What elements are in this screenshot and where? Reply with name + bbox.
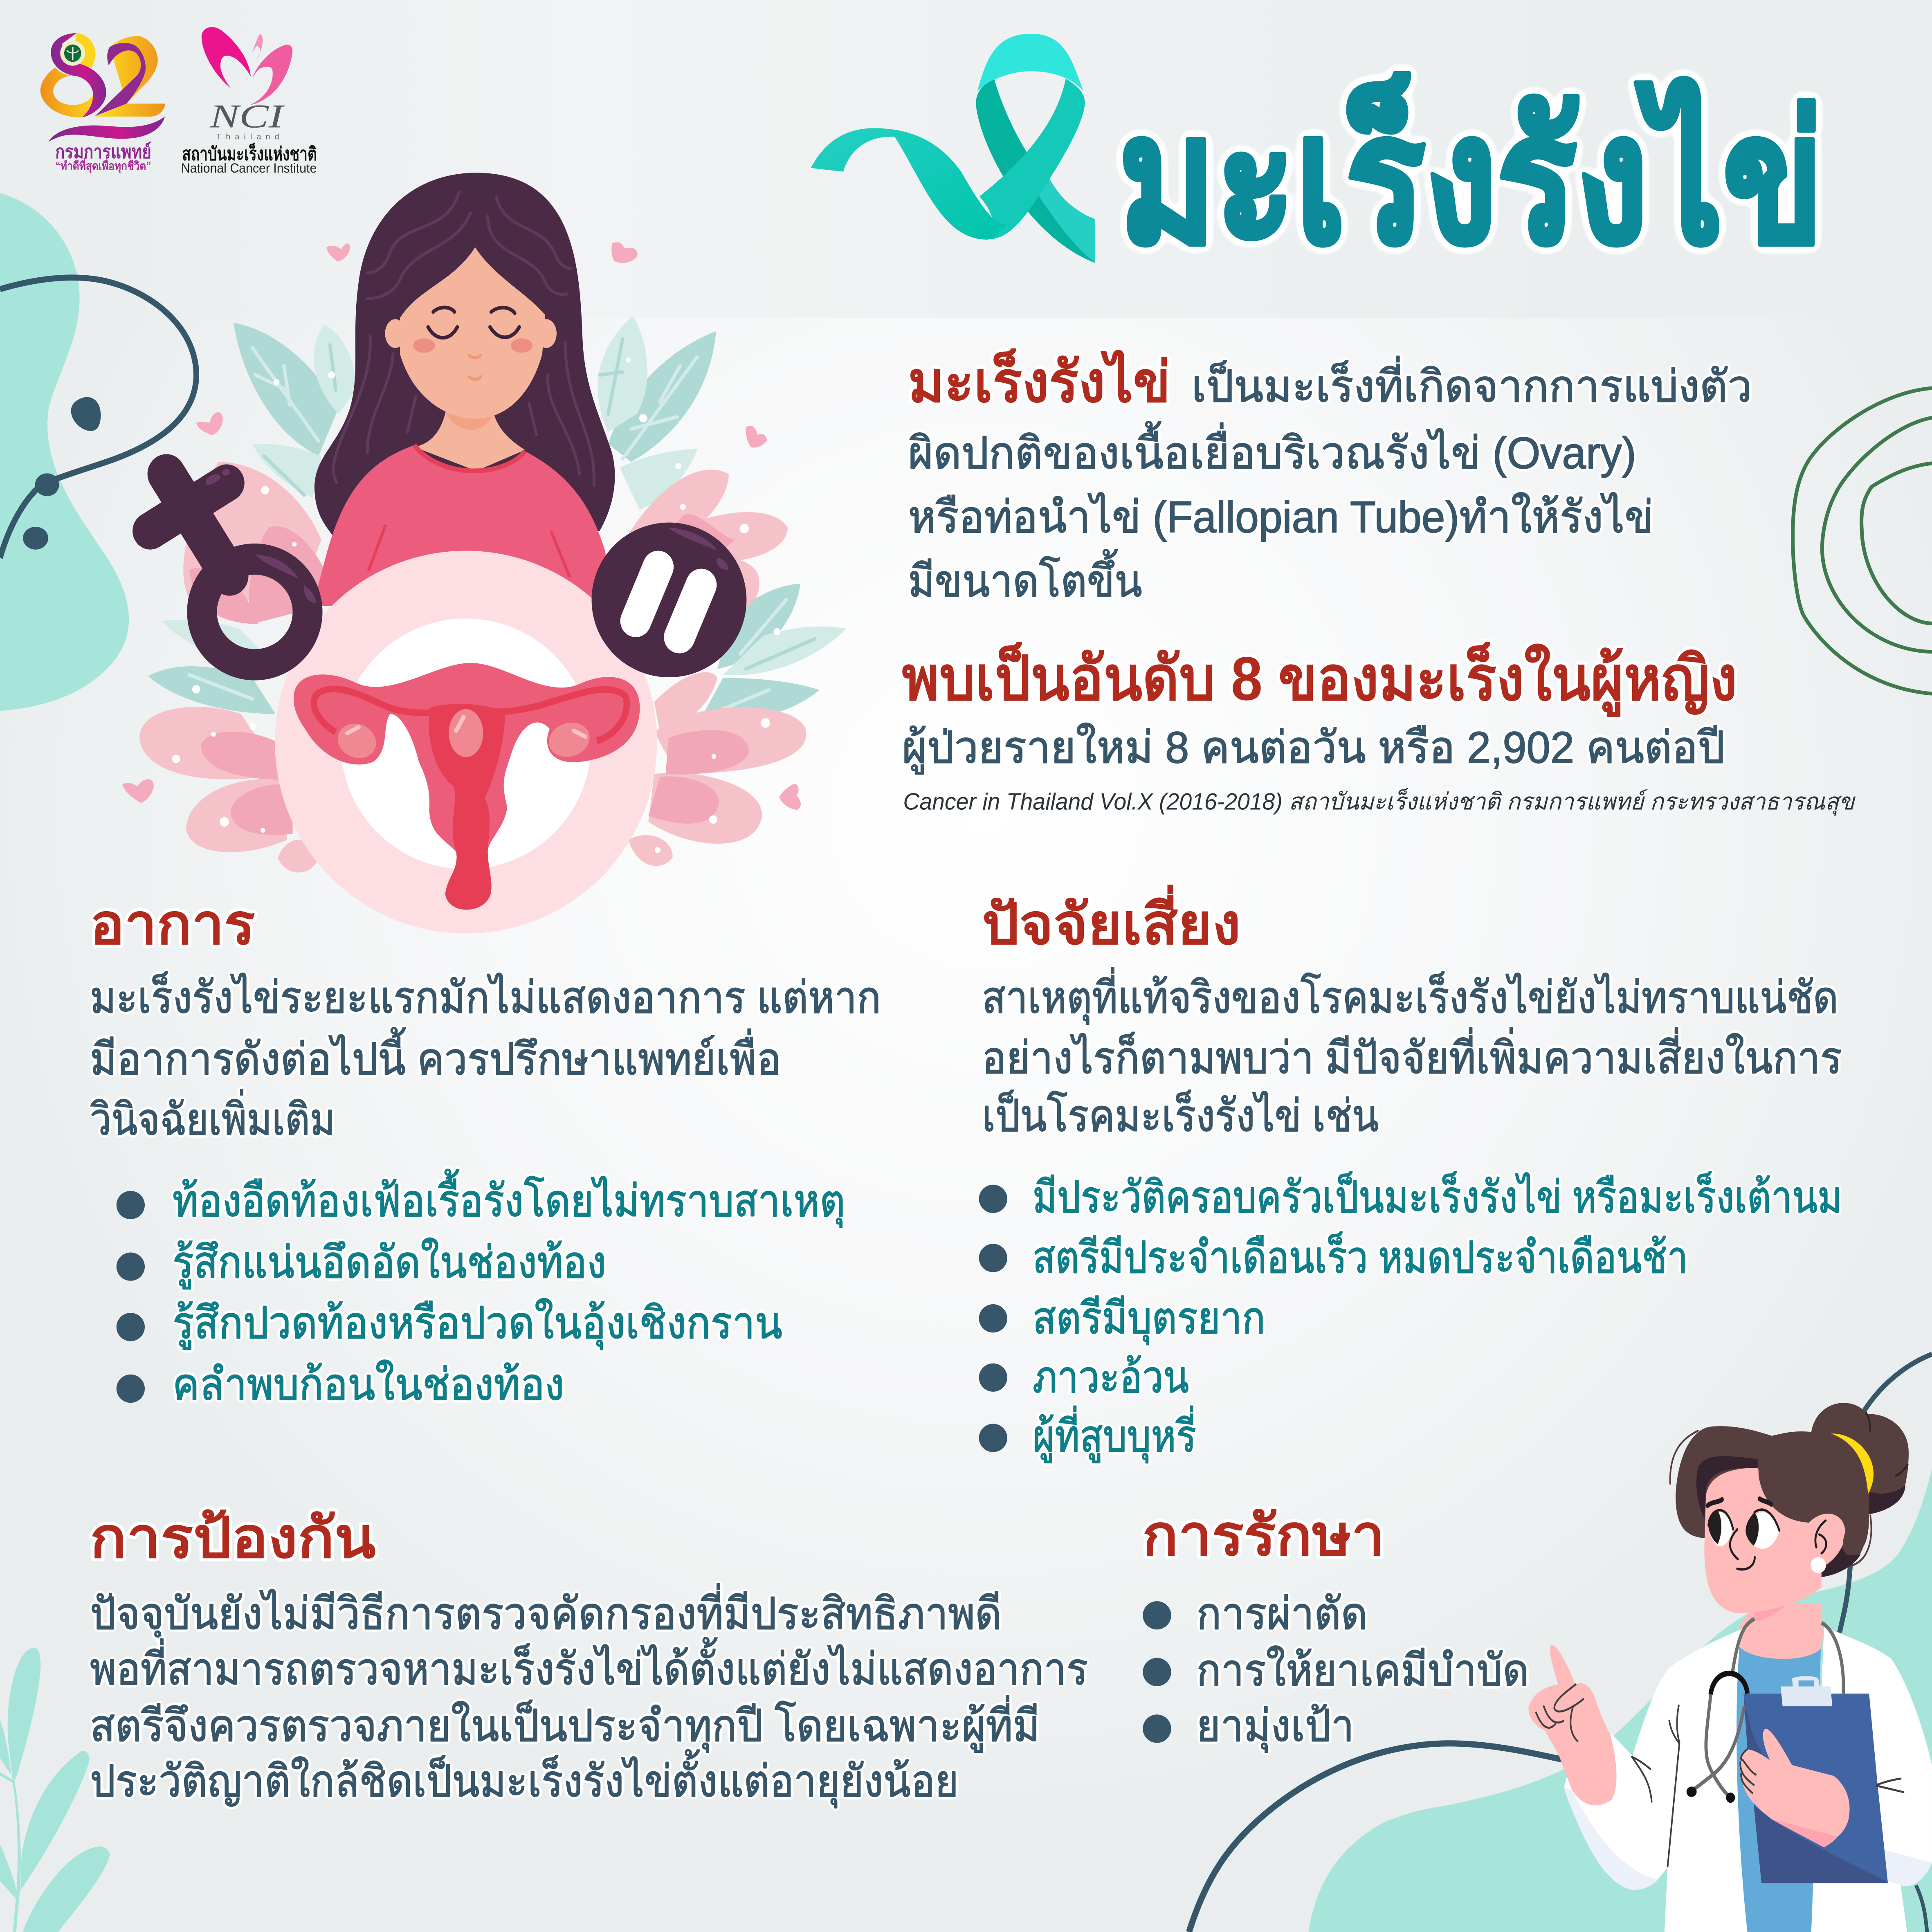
list: risk factors: สตรีมีประจำเดือนเร็ว หมดประจำเดือนช้า <box>1033 1231 1688 1282</box>
decorative rings: right <box>1793 388 1932 694</box>
logo: Department of Medical Services 82 <box>40 33 165 173</box>
left hand pointing <box>1528 1644 1617 1805</box>
statistic callout: Cancer in Thailand Vol.X (2016-2018) สถาบันมะเร็งแห่งชาติ กรมการแพทย์ กระทรวงสาธารณสุข <box>903 788 1856 815</box>
heading: symptoms: อาการ <box>90 893 255 956</box>
text: prevention: ปัจจุบันยังไม่มีวิธีการตรวจคัดกรองที่มีประสิทธิภาพดี <box>90 1583 1002 1641</box>
list: risk factors: สตรีมีบุตรยาก <box>1033 1293 1265 1345</box>
text: risk intro: สาเหตุที่แท้จริงของโรคมะเร็งรังไข่ยังไม่ทราบแน่ชัด <box>982 967 1838 1024</box>
heading: risk factors: ปัจจัยเสี่ยง <box>982 884 1241 956</box>
right hand and arm <box>1740 1728 1849 1847</box>
list: symptoms: คลำพบก้อนในช่องท้อง <box>173 1359 564 1409</box>
decorative blob: left <box>0 193 196 711</box>
text: prevention: พอที่สามารถตรวจหามะเร็งรังไข่ได้ตั้งแต่ยังไม่แสดงอาการ <box>90 1637 1088 1694</box>
eyes <box>1707 1499 1826 1569</box>
neck <box>1739 1603 1824 1659</box>
list: symptoms: รู้สึกปวดท้องหรือปวดในอุ้งเชิงกราน <box>173 1298 782 1350</box>
intro paragraph: ผิดปกติของเนื้อเยื่อบริเวณรังไข่ (Ovary) <box>908 421 1636 478</box>
illustration: woman with uterus <box>122 173 846 934</box>
sweater <box>313 445 609 606</box>
list: treatment <box>1143 1589 1529 1753</box>
hair shade <box>1696 1456 1905 1577</box>
hair back <box>1676 1403 1909 1577</box>
logo text: NCI <box>209 98 285 135</box>
list: symptoms <box>117 1169 845 1409</box>
illustration: doctor <box>1528 1403 1932 1932</box>
panel: risk factors <box>979 884 1842 1463</box>
statistic callout <box>902 641 1856 815</box>
text: risk intro: อย่างไรก็ตามพบว่า มีปัจจัยที่เพิ่มความเสี่ยงในการ <box>982 1027 1842 1083</box>
icon: pill circle <box>592 523 746 677</box>
uterus <box>294 663 640 910</box>
intro paragraph: หรือท่อนำไข่ (Fallopian Tube)ทำให้รังไข่ <box>908 492 1653 542</box>
text: prevention <box>90 1583 1088 1808</box>
hair strands <box>333 192 594 486</box>
list: treatment: การให้ยาเคมีบำบัด <box>1196 1645 1529 1695</box>
text: symptoms intro <box>90 971 881 1144</box>
hair band <box>1831 1433 1874 1494</box>
list: symptoms: ท้องอืดท้องเฟ้อเรื้อรังโดยไม่ทราบสาเหตุ <box>173 1169 845 1228</box>
icon: teal awareness ribbon <box>811 34 1095 263</box>
list: risk factors <box>979 1171 1842 1463</box>
hair lines <box>1866 1413 1908 1476</box>
text: prevention: สตรีจึงควรตรวจภายในเป็นประจำทุกปี โดยเฉพาะผู้ที่มี <box>90 1695 1040 1753</box>
earring <box>1811 1557 1826 1573</box>
text: symptoms intro: วินิจฉัยเพิ่มเติม <box>90 1089 335 1144</box>
text: symptoms intro: มะเร็งรังไข่ระยะแรกมักไม่แสดงอาการ แต่หาก <box>90 971 881 1022</box>
logo mark: butterfly <box>202 27 292 105</box>
flower petals <box>139 357 806 872</box>
hearts <box>122 242 801 810</box>
face <box>1704 1468 1845 1613</box>
woman hair <box>315 173 615 543</box>
list: treatment: การผ่าตัด <box>1196 1589 1368 1638</box>
list: risk factors: ผู้ที่สูบบุหรี่ <box>1033 1406 1196 1463</box>
shirt <box>1737 1647 1821 1932</box>
logo text: กรมการแพทย์ <box>55 142 151 162</box>
text: symptoms intro: มีอาการดังต่อไปนี้ ควรปรึกษาแพทย์เพื่อ <box>90 1027 781 1084</box>
decorative plant: bottom left <box>0 1648 110 1932</box>
stethoscope ends <box>1687 1786 1735 1803</box>
logo: Department of Medical Services 82: “ทำดีที่สุดเพื่อทุกชีวิต” <box>56 158 151 173</box>
list: treatment: ยามุ่งเป้า <box>1196 1701 1354 1753</box>
intro paragraph: มะเร็งรังไข่ <box>908 348 1170 414</box>
leaves <box>148 316 846 721</box>
statistic callout: พบเป็นอันดับ 8 ของมะเร็งในผู้หญิง <box>902 641 1737 717</box>
coat lines <box>1632 1705 1903 1867</box>
stethoscope <box>1692 1619 1843 1797</box>
panel: symptoms <box>90 893 881 1409</box>
logo: National Cancer Institute: สถาบันมะเร็งแห่งชาติ <box>182 143 317 164</box>
text: prevention: ประวัติญาติใกล้ชิดเป็นมะเร็งรังไข่ตั้งแต่อายุยังน้อย <box>90 1750 959 1808</box>
coat <box>1564 1627 1932 1932</box>
list: risk factors: ภาวะอ้วน <box>1033 1352 1189 1402</box>
logo: National Cancer Institute: Thailand <box>216 132 279 141</box>
panel: treatment <box>1142 1504 1529 1753</box>
panel: prevention <box>90 1507 1088 1808</box>
icon: female symbol <box>151 469 316 665</box>
clipboard <box>1743 1676 1888 1883</box>
heading: prevention: การป้องกัน <box>90 1507 376 1570</box>
uterus circle <box>275 551 657 934</box>
logo: National Cancer Institute <box>181 27 317 175</box>
hair front <box>1758 1432 1869 1555</box>
logo: National Cancer Institute: National Cancer Institute <box>181 161 317 175</box>
intro paragraph: เป็นมะเร็งที่เกิดจากการแบ่งตัว <box>1191 356 1752 411</box>
list: symptoms: รู้สึกแน่นอึดอัดในช่องท้อง <box>173 1238 606 1289</box>
statistic callout: ผู้ป่วยรายใหม่ 8 คนต่อวัน หรือ 2,902 คนต่อปี <box>902 723 1725 775</box>
intro paragraph: มีขนาดโตขึ้น <box>908 549 1142 606</box>
decorative blob and curves: bottom right <box>1189 1354 1932 1932</box>
neck and face <box>385 247 557 471</box>
logo mark: 82 <box>40 33 165 142</box>
heading: treatment: การรักษา <box>1142 1504 1385 1567</box>
text: risk intro <box>982 967 1842 1141</box>
intro paragraph <box>908 348 1752 606</box>
text: risk intro: เป็นโรคมะเร็งรังไข่ เช่น <box>982 1090 1379 1141</box>
